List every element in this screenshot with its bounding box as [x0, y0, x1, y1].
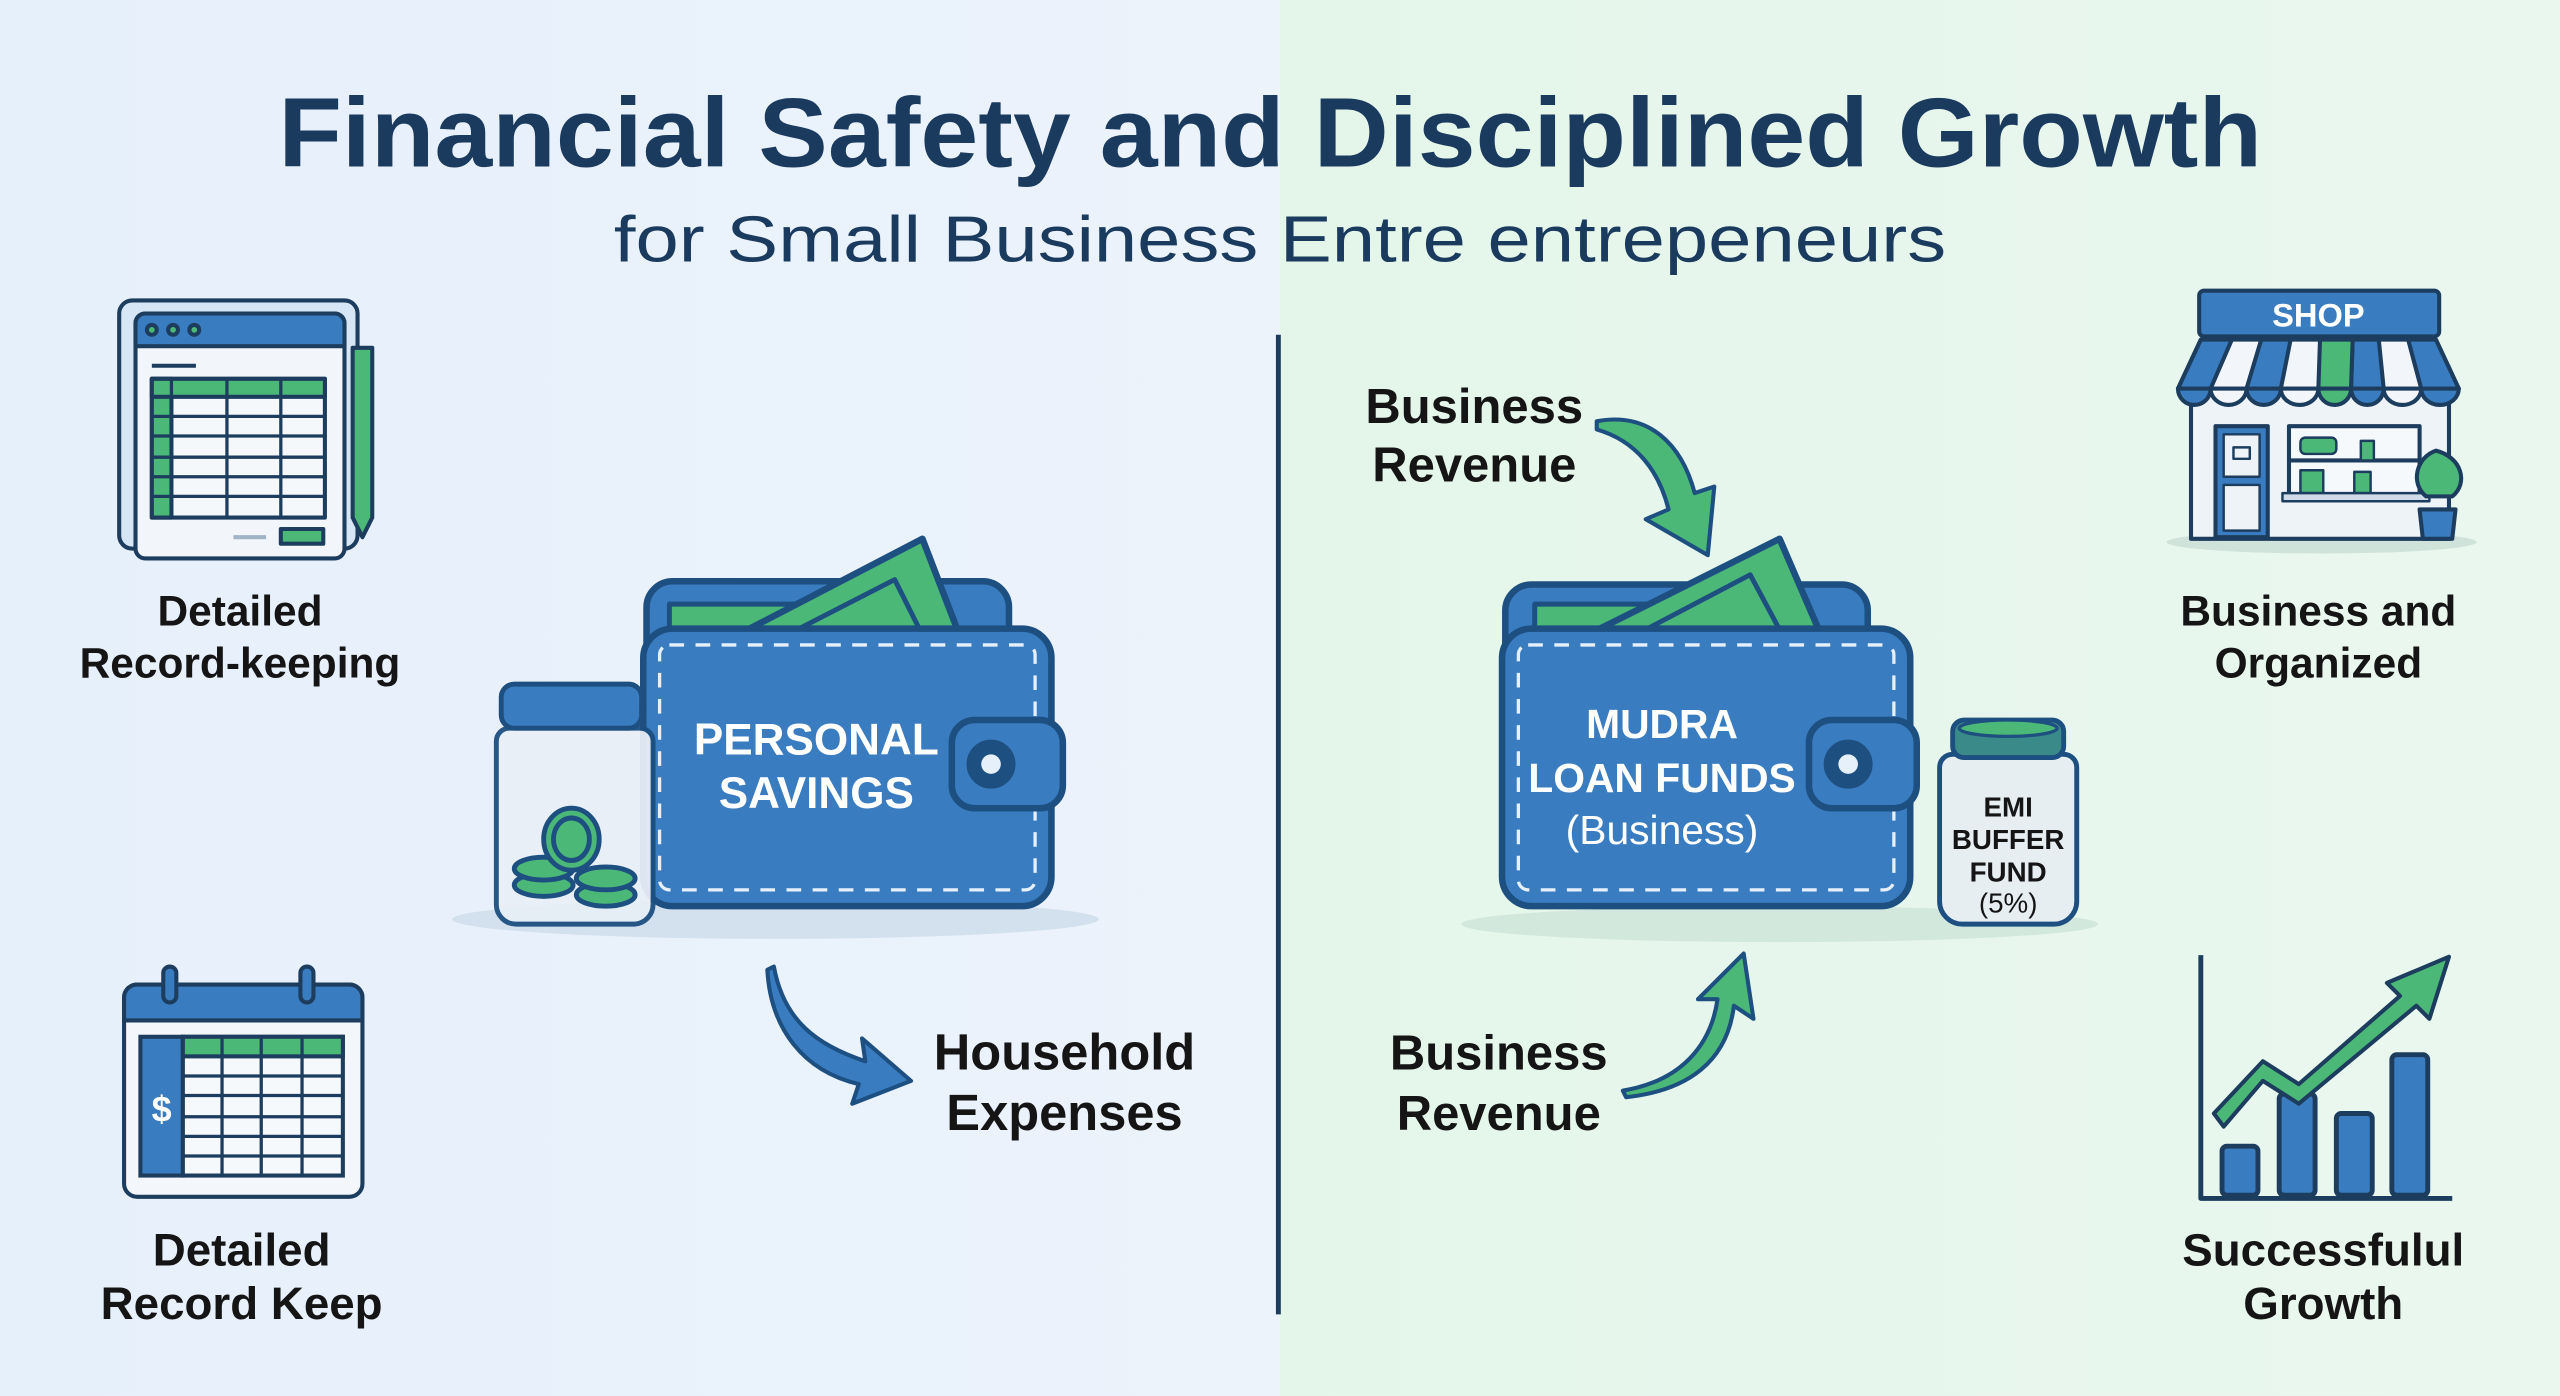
icon: EMI buffer jar: [1940, 720, 2077, 924]
icon: EMI buffer jar: (5%): [1979, 888, 2037, 919]
icon: shop: [2167, 291, 2477, 554]
label: detailed record keep: Record Keep: [101, 1278, 383, 1329]
label: household expenses: Household: [934, 1023, 1195, 1080]
wallet: mudra loan funds: MUDRA: [1586, 701, 1738, 747]
wallet: mudra loan funds: LOAN FUNDS: [1528, 755, 1796, 801]
icon: calendar: [124, 967, 362, 1197]
icon: coin jar: [496, 684, 653, 924]
label: successful growth: Successfulul: [2182, 1224, 2464, 1275]
arrow: revenue in top: [1597, 420, 1714, 555]
wallet: personal savings: SAVINGS: [719, 769, 914, 818]
icon: calendar: $: [152, 1089, 172, 1130]
label: detailed record-keeping: Record-keeping: [80, 640, 400, 687]
icon: EMI buffer jar: BUFFER: [1952, 824, 2064, 855]
icon: growth chart: [2201, 955, 2452, 1198]
arrow: to household expenses: [767, 967, 911, 1104]
wallet: mudra loan funds: [1461, 539, 2098, 942]
title: Financial Safety and Disciplined Growth: [278, 78, 2262, 188]
icon: shop: SHOP: [2272, 297, 2365, 334]
label: detailed record-keeping: Detailed: [157, 587, 323, 634]
label: business revenue top: Revenue: [1372, 439, 1576, 493]
wallet: personal savings: PERSONAL: [694, 715, 939, 764]
label: successful growth: Growth: [2243, 1278, 2403, 1329]
label: business and organized: Organized: [2215, 640, 2422, 687]
label: detailed record keep: Detailed: [153, 1224, 331, 1275]
wallet: mudra loan funds: (Business): [1566, 807, 1758, 853]
label: business and organized: Business and: [2180, 587, 2456, 634]
subtitle: for Small Business Entre entrepeneurs: [614, 202, 1946, 275]
icon: EMI buffer jar: FUND: [1970, 857, 2047, 888]
label: household expenses: Expenses: [946, 1084, 1183, 1141]
label: business revenue bottom: Business: [1390, 1026, 1608, 1080]
icon: spreadsheet: [119, 300, 372, 558]
arrow: revenue in bottom: [1623, 954, 1753, 1097]
wallet: personal savings: [452, 539, 1099, 939]
icon: EMI buffer jar: EMI: [1983, 791, 2033, 822]
label: business revenue top: Business: [1365, 380, 1583, 434]
label: business revenue bottom: Revenue: [1397, 1087, 1601, 1141]
